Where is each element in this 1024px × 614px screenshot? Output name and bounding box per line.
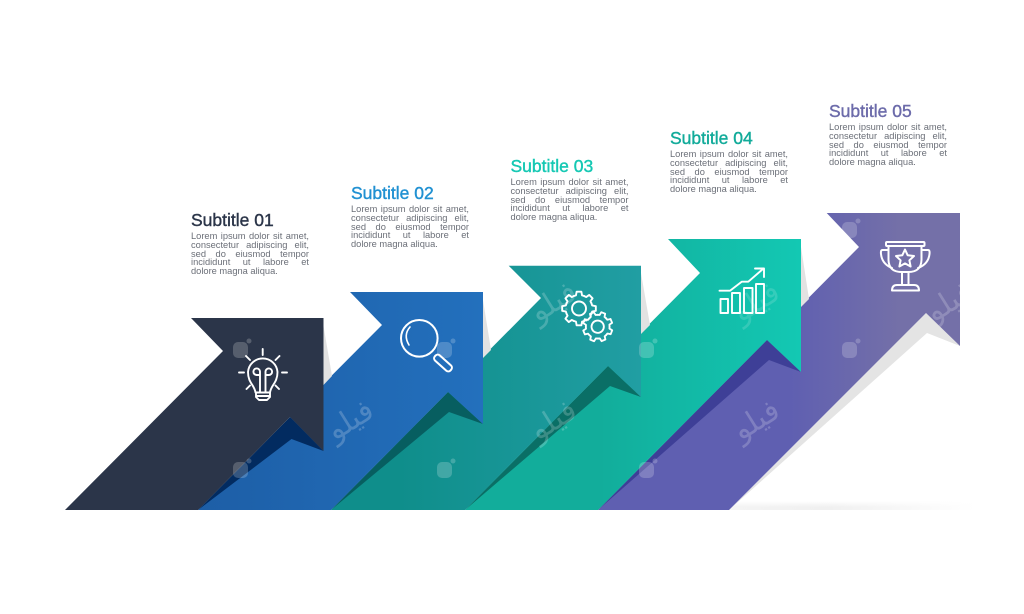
body text 01: consectetur adipiscing elit, [191, 240, 309, 250]
body text 01: incididunt ut labore et [191, 257, 309, 267]
body text 04 [670, 149, 788, 194]
text block: subtitle 01 [191, 210, 309, 276]
text block: subtitle 04 [670, 128, 788, 194]
body text 05: sed do eiusmod tempor [829, 140, 947, 150]
watermarks on arrow 1 [233, 338, 252, 478]
text block: subtitle 02 [351, 183, 469, 249]
body text 05: Lorem ipsum dolor sit amet, [829, 122, 947, 132]
text block: subtitle 05 [829, 101, 947, 167]
body text 05: consectetur adipiscing elit, [829, 131, 947, 141]
body text 02 [351, 204, 469, 249]
body text 02: dolore magna aliqua. [351, 239, 438, 249]
body text 05: incididunt ut labore et [829, 148, 947, 158]
heading: subtitle 05: Subtitle 05 [829, 101, 912, 121]
icon: gears [562, 292, 617, 346]
body text 02: consectetur adipiscing elit, [351, 213, 469, 223]
heading: subtitle 01: Subtitle 01 [191, 210, 274, 230]
shadow: arrow 3 tip on arrow 4 [465, 366, 641, 510]
body text 01 [191, 231, 309, 276]
watermarks on arrows 3 and 4: فيلو [522, 393, 583, 449]
watermarks on arrow 5 [740, 218, 960, 448]
body text 03 [510, 177, 628, 222]
heading: subtitle 03: Subtitle 03 [510, 156, 593, 176]
body text 04: incididunt ut labore et [670, 175, 788, 185]
shadow: arrow 1 tip on arrow 2 [198, 417, 324, 510]
body text 03: incididunt ut labore et [510, 203, 628, 213]
body text 04: dolore magna aliqua. [670, 184, 757, 194]
ground shadow under arrow 5 [729, 501, 975, 510]
text block: subtitle 03 [510, 156, 628, 222]
body text 02: incididunt ut labore et [351, 230, 469, 240]
panel: arrow 1 [65, 318, 332, 510]
body text 01: Lorem ipsum dolor sit amet, [191, 231, 309, 241]
heading: subtitle 04: Subtitle 04 [670, 128, 753, 148]
shadow: arrow 4 tip on arrow 5 [598, 340, 801, 510]
body text 05: dolore magna aliqua. [829, 157, 916, 167]
icon: growth chart [720, 268, 764, 313]
body text 01: sed do eiusmod tempor [191, 249, 309, 259]
panel: arrow 3 [331, 266, 658, 510]
panel: arrow 5 [598, 213, 979, 510]
infographic artwork: five rising arrows [65, 213, 960, 510]
icon: magnifier [401, 320, 453, 373]
body text 01: dolore magna aliqua. [191, 266, 278, 276]
heading: subtitle 02: Subtitle 02 [351, 183, 434, 203]
body text 02: sed do eiusmod tempor [351, 222, 469, 232]
body text 03: dolore magna aliqua. [510, 212, 597, 222]
watermarks on arrows 3 and 4 [437, 274, 658, 478]
icon: trophy [881, 242, 930, 290]
icon: light bulb [239, 349, 287, 400]
body text 03: sed do eiusmod tempor [510, 195, 628, 205]
body text 05 [829, 122, 947, 167]
watermarks on arrow 2 [319, 338, 456, 449]
body text 03: Lorem ipsum dolor sit amet, [510, 177, 628, 187]
body text 04: sed do eiusmod tempor [670, 167, 788, 177]
watermarks on arrow 5: فيلو [918, 274, 979, 331]
panel: arrow 2 [198, 292, 491, 510]
panel: arrow 4 [465, 239, 809, 510]
shadow: arrow 2 tip on arrow 3 [331, 392, 483, 510]
watermarks on arrow 2: فيلو [319, 393, 380, 449]
body text 04: consectetur adipiscing elit, [670, 158, 788, 168]
watermarks on arrow 5: فيلو [725, 393, 786, 449]
body text 03: consectetur adipiscing elit, [510, 186, 628, 196]
body text 04: Lorem ipsum dolor sit amet, [670, 149, 788, 159]
watermark on arrow 4: فيلو [725, 274, 786, 331]
body text 02: Lorem ipsum dolor sit amet, [351, 204, 469, 214]
watermarks on arrows 3 and 4: فيلو [522, 274, 583, 331]
